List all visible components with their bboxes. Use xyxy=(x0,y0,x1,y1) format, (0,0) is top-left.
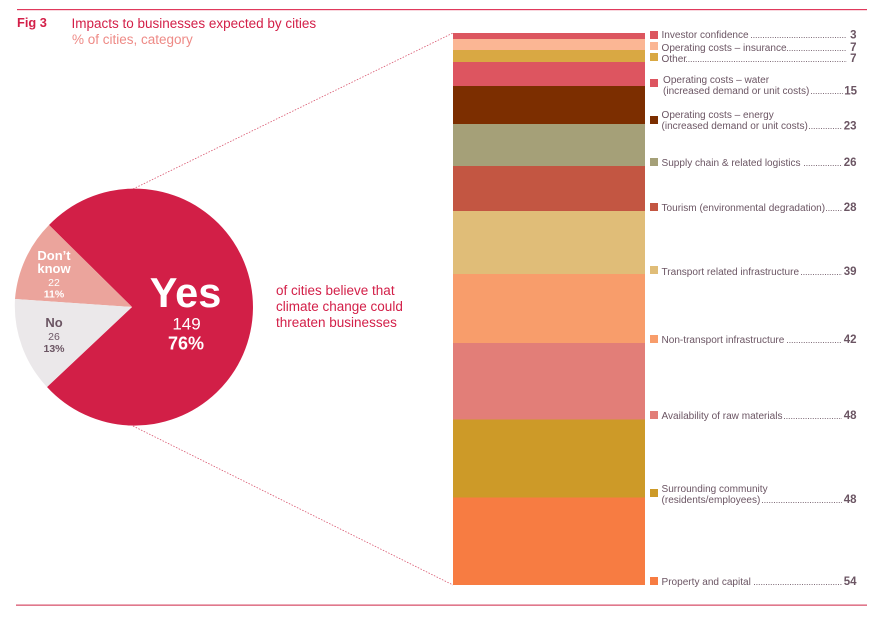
legend: raw materials: 48 xyxy=(844,410,857,422)
legend: property and capital xyxy=(650,576,857,588)
legend: other: Other xyxy=(662,54,687,65)
legend: transport infrastructure: 39 xyxy=(844,266,856,278)
legend: operating costs energy xyxy=(650,110,856,132)
label: no xyxy=(43,315,65,355)
legend xyxy=(650,30,858,588)
callout text: climate change could xyxy=(276,299,403,314)
legend: transport infrastructure: Transport related infrastructure xyxy=(662,267,799,278)
pie chart xyxy=(15,189,253,426)
connector: pie bottom to bar bottom xyxy=(133,426,453,585)
label: no: 13% xyxy=(43,343,65,355)
label: don't know: know xyxy=(37,261,71,276)
figure number: Fig 3 xyxy=(17,15,47,30)
label: yes: Yes xyxy=(150,269,221,316)
legend: other: 7 xyxy=(850,53,856,65)
legend: operating costs water: Operating costs – water xyxy=(663,75,770,86)
legend: operating costs water: 15 xyxy=(844,86,858,98)
label: don't know: Don’t xyxy=(37,248,71,263)
legend: operating costs water: (increased demand or unit costs) xyxy=(663,86,809,97)
legend: investor confidence: Investor confidence xyxy=(662,30,749,41)
legend: tourism: Tourism (environmental degradation) xyxy=(662,203,825,214)
legend: operating costs energy: Operating costs – energy xyxy=(662,110,774,121)
slice: don't know xyxy=(15,225,132,307)
legend: non-transport infrastructure: Non-transport infrastructure xyxy=(662,335,785,346)
legend: supply chain xyxy=(650,157,856,169)
legend: operating costs insurance: Operating costs – insurance xyxy=(662,43,787,54)
legend: supply chain: Supply chain & related logistics xyxy=(662,158,801,169)
legend: surrounding community: 48 xyxy=(844,494,857,506)
callout text: threaten businesses xyxy=(276,315,397,330)
slice: yes xyxy=(47,189,253,426)
label: no: No xyxy=(45,315,63,330)
label: no: 26 xyxy=(48,331,60,343)
label: yes: 76% xyxy=(168,334,204,354)
legend: non-transport infrastructure: 42 xyxy=(844,334,856,346)
legend: transport infrastructure xyxy=(650,266,856,278)
connector: pie top to bar top xyxy=(133,33,453,189)
legend: surrounding community: (residents/employees) xyxy=(662,495,760,506)
subtitle: % of cities, category xyxy=(72,32,193,47)
label: don't know xyxy=(37,248,71,300)
legend: operating costs insurance: 7 xyxy=(850,42,856,54)
label: don't know: 11% xyxy=(44,288,65,300)
legend: raw materials: Availability of raw materials xyxy=(662,411,782,422)
legend: operating costs energy: 23 xyxy=(844,120,856,132)
legend: property and capital: 54 xyxy=(844,576,857,588)
callout text xyxy=(276,283,403,330)
label: yes xyxy=(150,269,221,354)
legend: operating costs water xyxy=(650,75,858,98)
legend: other xyxy=(650,53,856,65)
legend: supply chain: 26 xyxy=(844,157,856,169)
stacked bar xyxy=(453,33,645,585)
legend: tourism: 28 xyxy=(844,202,857,214)
legend: investor confidence xyxy=(650,30,856,42)
legend: non-transport infrastructure xyxy=(650,334,856,346)
legend: raw materials xyxy=(650,410,857,422)
slice: no xyxy=(15,299,132,387)
legend: investor confidence: 3 xyxy=(850,30,856,42)
title: Impacts to businesses expected by cities xyxy=(72,16,316,31)
legend: operating costs energy: (increased demand or unit costs) xyxy=(662,121,808,132)
label: don't know: 22 xyxy=(48,277,60,289)
legend: surrounding community: Surrounding community xyxy=(662,484,768,495)
legend: surrounding community xyxy=(650,484,857,506)
legend: property and capital: Property and capital xyxy=(662,577,751,588)
legend: operating costs insurance xyxy=(650,42,856,54)
label: yes: 149 xyxy=(172,314,201,334)
callout text: of cities believe that xyxy=(276,283,395,298)
